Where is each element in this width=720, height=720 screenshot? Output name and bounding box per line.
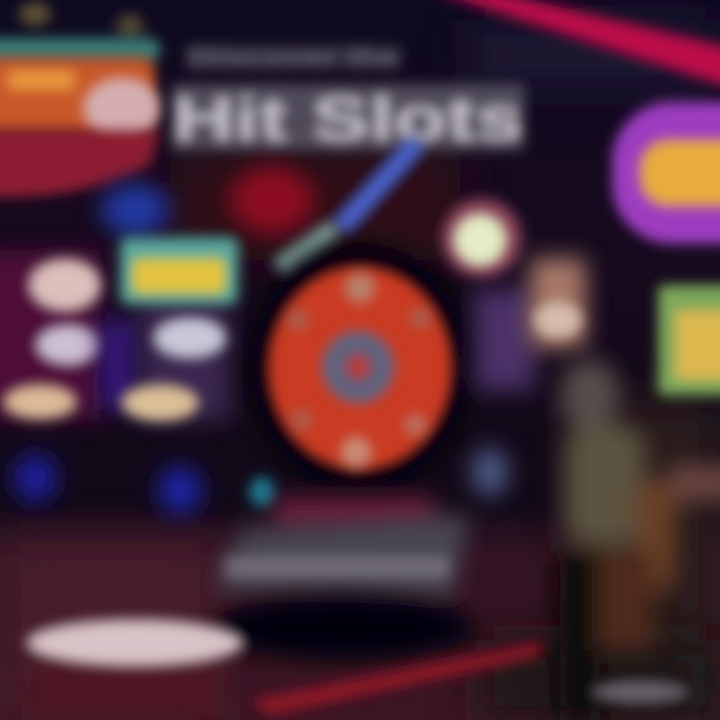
floor highlight <box>250 642 688 716</box>
top-left carousel sign <box>0 2 160 197</box>
wheel pointer <box>278 142 418 268</box>
neon streak <box>430 0 720 92</box>
roulette wheel <box>252 244 468 492</box>
wheel base console <box>215 497 475 660</box>
bottom-left white stool <box>27 620 243 720</box>
glowing ball light <box>442 198 522 278</box>
right purple neon sign <box>612 102 720 244</box>
blue and red lights above the slots <box>101 166 314 236</box>
blurred title text: Hit Slots <box>172 85 524 154</box>
right slot machines <box>472 258 720 496</box>
person at right <box>560 359 720 720</box>
blurred title text <box>172 44 524 154</box>
blurred title text: Discover the <box>190 44 400 71</box>
central slot machine <box>100 238 275 514</box>
left slot machine <box>0 250 101 502</box>
